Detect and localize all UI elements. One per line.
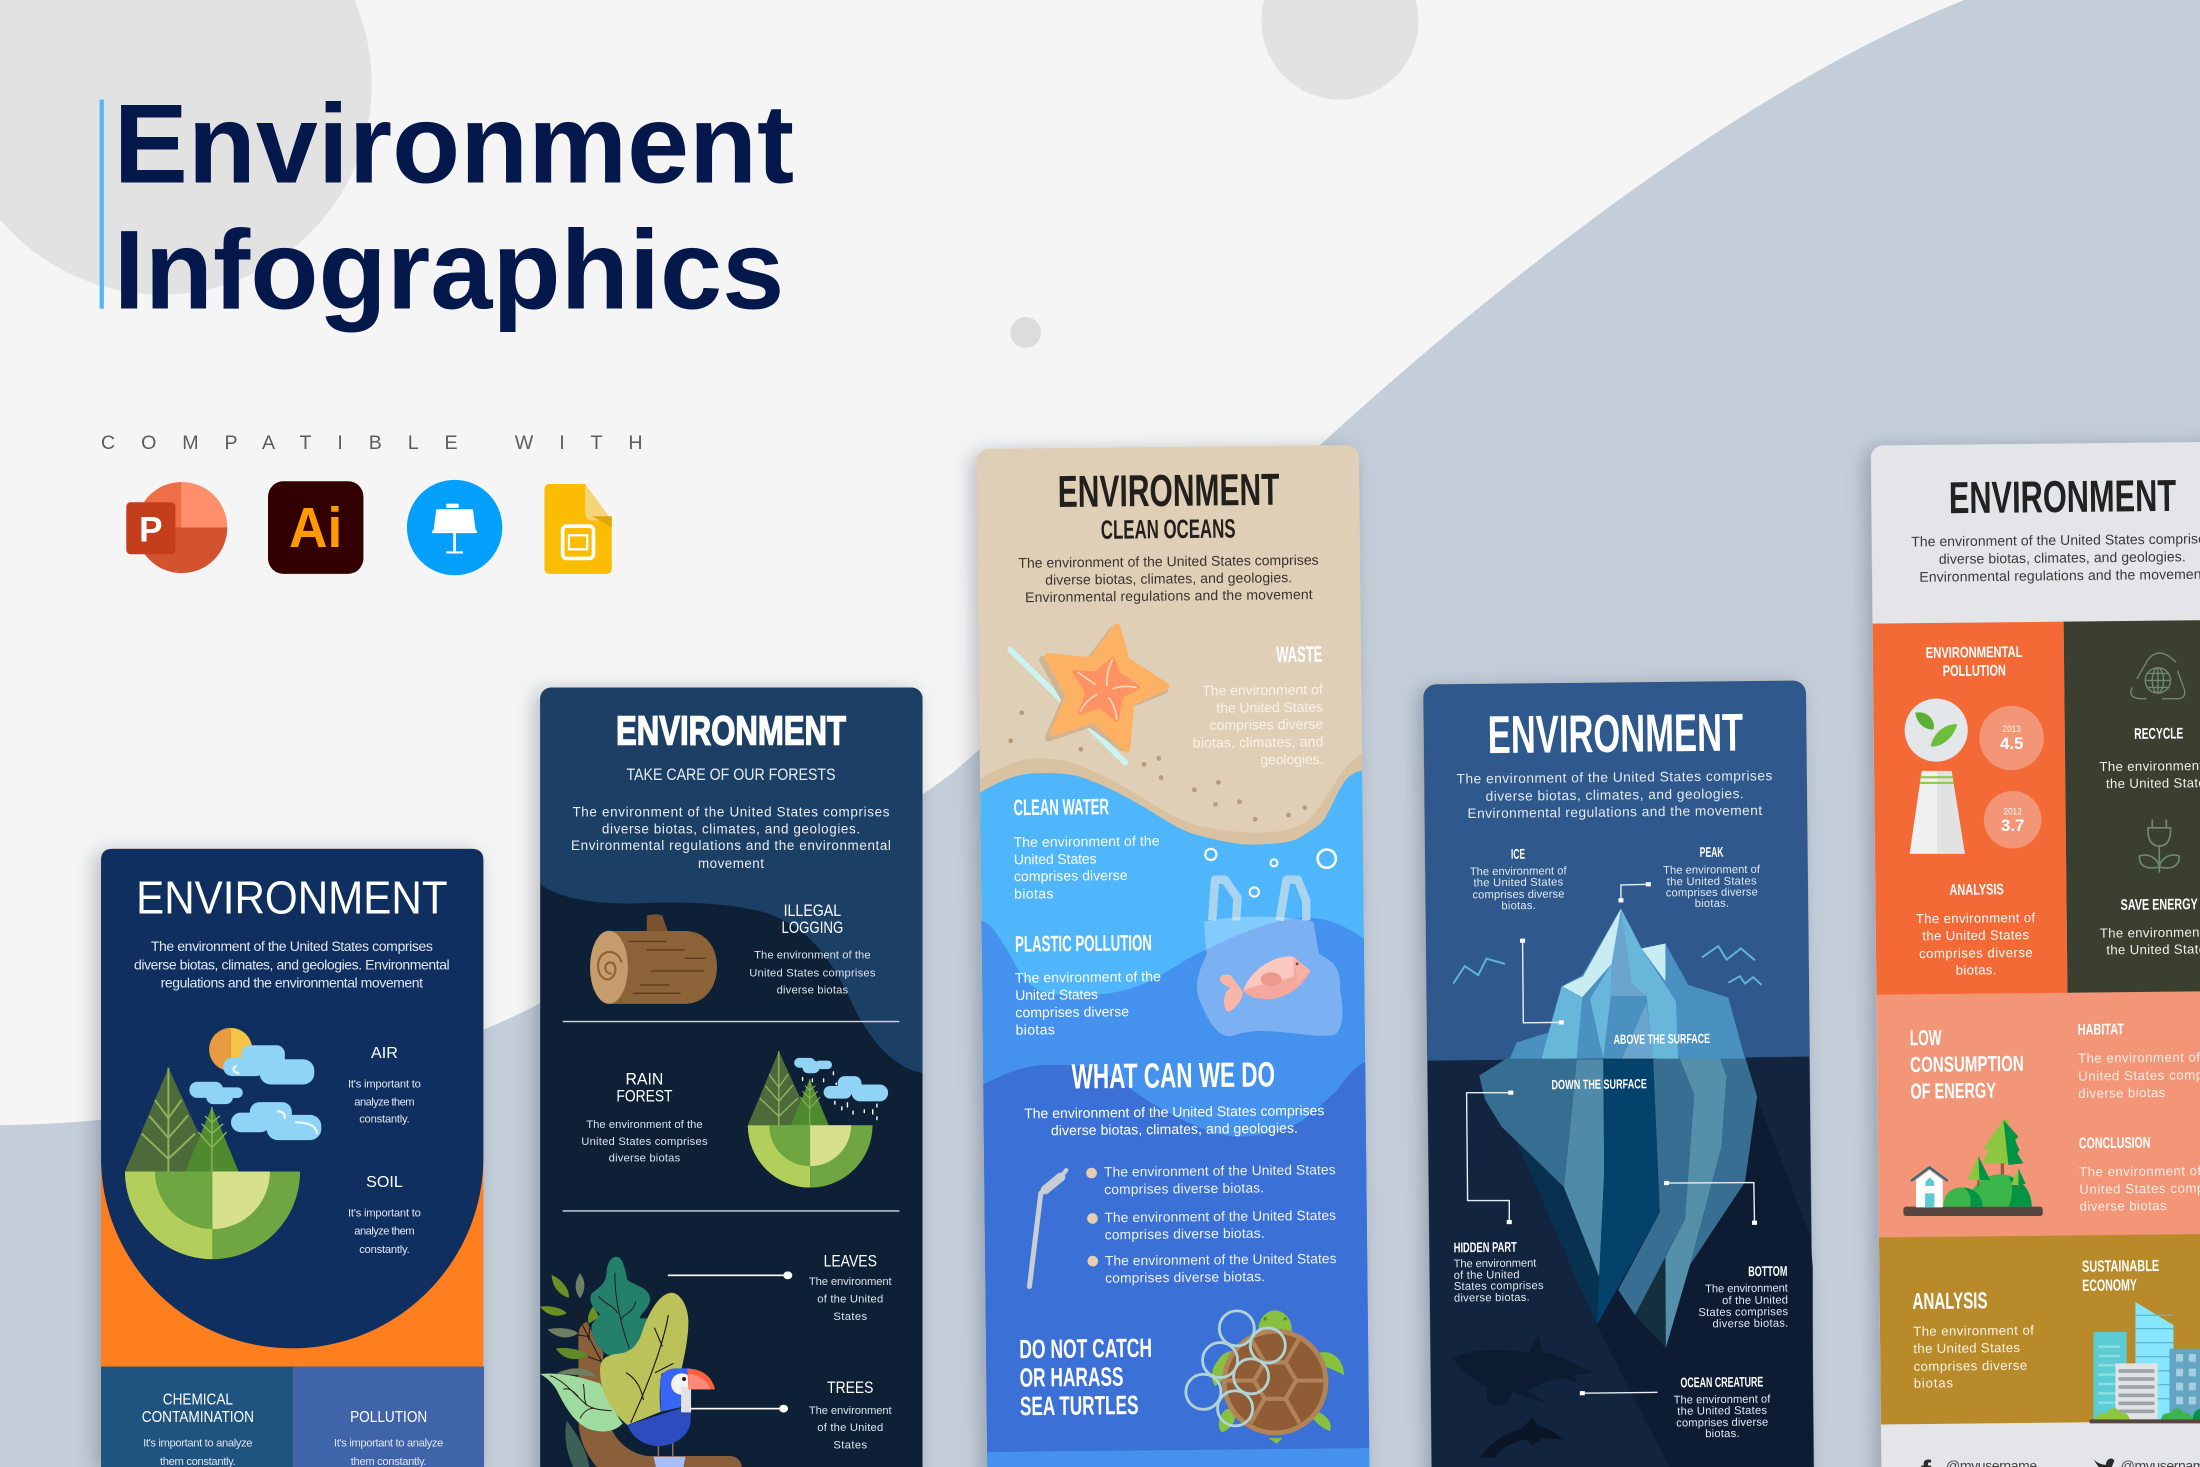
- soil label: [348, 1173, 421, 1256]
- hidden part text: States comprises: [1454, 1280, 1544, 1293]
- chemical contamination text: CHEMICAL: [163, 1390, 233, 1408]
- title: Environment: [114, 80, 794, 206]
- leaves text: The environment: [809, 1276, 893, 1288]
- bottom text: [1698, 1263, 1789, 1330]
- surface labels: DOWN THE SURFACE: [1551, 1076, 1647, 1092]
- waste text: geologies.: [1260, 751, 1324, 767]
- card 4 intro: Environmental regulations and the movement: [1467, 803, 1762, 821]
- card 5 intro: Environmental regulations and the movement: [1919, 566, 2200, 585]
- illegal logging text: ILLEGAL: [784, 901, 841, 920]
- environmental pollution heading: POLLUTION: [1943, 662, 2006, 680]
- hidden part text: [1453, 1238, 1544, 1305]
- plastic pollution text: United States: [1015, 986, 1098, 1003]
- chemical contamination text: [142, 1390, 254, 1467]
- trees text: [809, 1378, 893, 1452]
- data bubble 2013: 4.5: [2000, 734, 2023, 753]
- peak text: the United States: [1667, 875, 1757, 888]
- card 2 intro: movement: [698, 856, 764, 871]
- soil label: It's important to: [348, 1207, 421, 1219]
- title accent bar: [100, 100, 104, 309]
- water shadow: [1597, 1097, 1813, 1467]
- bullet list: comprises diverse biotas.: [1104, 1180, 1264, 1197]
- peak text: The environment of: [1663, 864, 1761, 877]
- bullet list: The environment of the United States: [1104, 1208, 1336, 1225]
- low consumption heading: LOW: [1910, 1025, 1942, 1050]
- ocean creature text: comprises diverse: [1676, 1417, 1768, 1430]
- card 1 intro: The environment of the United States comprises: [151, 938, 433, 954]
- callout lines: [1467, 882, 1757, 1395]
- card 4 intro: diverse biotas, climates, and geologies.: [1485, 786, 1744, 804]
- leaves text: [809, 1251, 893, 1323]
- analysis text: The environment of: [1916, 910, 2036, 926]
- analysis text: ANALYSIS: [1949, 881, 2004, 899]
- card 3 intro: The environment of the United States comprises: [1018, 552, 1319, 571]
- leaves text: LEAVES: [824, 1251, 877, 1270]
- data bubble 2012: [1984, 791, 2041, 849]
- peak text: biotas.: [1695, 898, 1729, 910]
- clean water text: The environment of the: [1014, 833, 1160, 850]
- rain forest text: diverse biotas: [609, 1153, 681, 1165]
- data bubble 2012: 3.7: [2001, 816, 2024, 835]
- illustration: iceberg above water: [1510, 908, 1745, 1059]
- illegal logging text: The environment of the: [754, 949, 871, 961]
- recycle text: [2099, 725, 2200, 791]
- card 2 intro: The environment of the United States comprises: [572, 805, 890, 820]
- card 1 background: [101, 849, 483, 1467]
- illustration: turtle with plastic rings: [1186, 1310, 1344, 1444]
- ice text: the United States: [1473, 876, 1564, 889]
- card 3 subtitle: CLEAN OCEANS: [1101, 513, 1236, 545]
- leaves connector: [668, 1271, 792, 1279]
- ice text: [1470, 845, 1568, 913]
- environmental pollution heading: ENVIRONMENTAL: [1926, 644, 2023, 662]
- card 3 intro: Environmental regulations and the movement: [1025, 586, 1313, 605]
- chemical contamination text: CONTAMINATION: [142, 1408, 254, 1426]
- card 1 chemical block: [101, 1367, 293, 1467]
- icon: Keynote: [407, 480, 502, 575]
- do not catch text: [1019, 1333, 1153, 1421]
- air label: It's important to: [348, 1078, 421, 1090]
- illustration: rain forest: [748, 1051, 888, 1188]
- peak text: comprises diverse: [1666, 886, 1758, 899]
- illustration: iceberg below water: [1479, 1056, 1757, 1348]
- low consumption heading: CONSUMPTION: [1910, 1051, 2024, 1077]
- icon: log: [590, 914, 717, 1004]
- air label: [348, 1044, 421, 1125]
- plastic pollution text: PLASTIC POLLUTION: [1015, 930, 1152, 957]
- peak text: PEAK: [1700, 844, 1724, 860]
- card 3 heading: ENVIRONMENT: [1058, 464, 1280, 517]
- sustainable economy heading: SUSTAINABLE: [2082, 1257, 2159, 1276]
- do not catch text: DO NOT CATCH: [1019, 1333, 1152, 1364]
- air label: analyze them: [354, 1097, 415, 1109]
- card 3 background waves: [977, 445, 1370, 1467]
- what can we do text: diverse biotas, climates, and geologies.: [1051, 1120, 1298, 1138]
- card 2 header wave: [540, 687, 923, 1073]
- compatible software icons: [126, 480, 612, 575]
- ocean creature text: biotas.: [1705, 1428, 1740, 1440]
- card 5 background blocks: [1871, 441, 2200, 1467]
- icon: Illustrator: [268, 481, 363, 574]
- panel: card 1 soil and air: [101, 849, 484, 1467]
- illustration: sea creatures: [1454, 1333, 1594, 1458]
- soil label: analyze them: [354, 1226, 415, 1238]
- clean water text: CLEAN WATER: [1013, 794, 1109, 820]
- air label: AIR: [371, 1044, 398, 1062]
- card 4 intro: The environment of the United States comprises: [1457, 768, 1772, 787]
- divider: [563, 1210, 899, 1212]
- clean water text: United States: [1014, 850, 1097, 867]
- icon: recycle globe: [2131, 653, 2185, 699]
- card 5 intro: diverse biotas, climates, and geologies.: [1939, 548, 2186, 567]
- bottom text: of the United: [1722, 1294, 1788, 1307]
- leaves text: States: [833, 1311, 867, 1323]
- card 4 intro: [1457, 768, 1773, 821]
- save energy text: [2099, 896, 2200, 957]
- panel: card 3 clean oceans: [977, 445, 1370, 1467]
- sustainable economy heading: ECONOMY: [2082, 1276, 2137, 1295]
- illustration: starfish and straw: [1008, 627, 1307, 822]
- trees text: TREES: [827, 1378, 873, 1397]
- air label: constantly.: [359, 1113, 410, 1125]
- hidden part text: diverse biotas.: [1454, 1292, 1530, 1305]
- what can we do text: The environment of the United States comprises: [1024, 1102, 1324, 1121]
- gold analysis text: [1912, 1287, 2035, 1391]
- ice text: The environment of: [1470, 865, 1568, 878]
- do not catch text: OR HARASS: [1019, 1362, 1124, 1393]
- ice text: comprises diverse: [1472, 888, 1565, 901]
- title: Infographics: [114, 207, 784, 333]
- bullet list: [1086, 1162, 1337, 1286]
- illegal logging text: [749, 901, 876, 996]
- trees text: The environment: [809, 1405, 893, 1417]
- illustration: land with trees and clouds: [125, 1028, 321, 1259]
- rain forest text: The environment of the: [586, 1119, 703, 1131]
- rain forest text: [581, 1070, 708, 1165]
- chemical contamination text: It's important to analyze: [143, 1438, 253, 1450]
- what can we do text: [1024, 1102, 1325, 1139]
- bullet list: The environment of the United States: [1105, 1251, 1337, 1268]
- bottom text: The environment: [1705, 1282, 1789, 1295]
- card 1 pollution block: [293, 1367, 484, 1467]
- birds: [1453, 946, 1762, 985]
- analysis text: comprises diverse: [1919, 945, 2033, 961]
- card 1 intro: diverse biotas, climates, and geologies. Environmental: [134, 956, 450, 972]
- low consumption heading: OF ENERGY: [1910, 1078, 1996, 1104]
- decorative small circle: [1010, 317, 1041, 348]
- clean water text: comprises diverse: [1014, 867, 1128, 884]
- trees connector: [690, 1405, 788, 1413]
- leaves text: of the United: [817, 1294, 883, 1306]
- illegal logging text: United States comprises: [749, 968, 876, 980]
- waste text: comprises diverse: [1209, 716, 1323, 733]
- plastic pollution text: comprises diverse: [1015, 1003, 1129, 1020]
- gold analysis text: biotas: [1914, 1375, 1953, 1391]
- conclusion text: [2079, 1134, 2200, 1214]
- rain forest text: FOREST: [616, 1086, 672, 1105]
- ocean creature text: [1673, 1373, 1772, 1441]
- do not catch text: SEA TURTLES: [1020, 1390, 1139, 1421]
- conclusion text: diverse biotas: [2079, 1198, 2167, 1214]
- hidden part text: HIDDEN PART: [1454, 1239, 1517, 1255]
- panel: card 5 energy: [1871, 441, 2200, 1467]
- illustration: house, trees, buildings: [1903, 1120, 2200, 1423]
- analysis text: the United States: [1922, 927, 2029, 943]
- illegal logging text: diverse biotas: [777, 984, 849, 996]
- compatible with label: COMPATIBLE WITH: [101, 432, 643, 454]
- icon: plug plant: [2139, 819, 2179, 873]
- plastic pollution text: The environment of the: [1015, 968, 1161, 986]
- surface labels: [1551, 1031, 1711, 1092]
- waste text: biotas, climates, and: [1193, 733, 1323, 751]
- illustration: bent straw: [1029, 1170, 1066, 1287]
- card 1 heading: ENVIRONMENT: [136, 871, 448, 923]
- data bubble 2013: 2013: [2003, 724, 2021, 734]
- ice text: ICE: [1511, 846, 1525, 862]
- environmental pollution heading: [1926, 644, 2023, 680]
- trees text: of the United: [817, 1422, 883, 1434]
- bullet list: comprises diverse biotas.: [1105, 1226, 1265, 1242]
- icon: PowerPoint: [126, 482, 227, 573]
- surface labels: ABOVE THE SURFACE: [1614, 1031, 1710, 1047]
- icon: Illustrator: Ai: [289, 496, 342, 559]
- low consumption heading: [1910, 1024, 2024, 1104]
- panel: card 2 forests: [540, 687, 923, 1467]
- card 1 navy dome: [101, 849, 483, 1348]
- card 2 intro: Environmental regulations and the environmental: [571, 838, 891, 853]
- bottom text: diverse biotas.: [1712, 1318, 1788, 1330]
- plastic pollution text: [1015, 930, 1162, 1038]
- clean water text: [1013, 794, 1160, 902]
- card 4 background: [1423, 681, 1815, 1467]
- soil label: SOIL: [366, 1173, 403, 1191]
- ocean creature text: OCEAN CREATURE: [1680, 1373, 1763, 1390]
- habitat text: diverse biotas: [2078, 1085, 2166, 1101]
- card 2 intro: [571, 805, 891, 871]
- card 1 intro: [134, 938, 450, 991]
- analysis text: biotas.: [1956, 962, 1996, 978]
- sustainable economy heading: [2082, 1257, 2160, 1295]
- decorative circle top: [1261, 0, 1418, 100]
- icon: Google Slides: [544, 484, 612, 574]
- waste text: WASTE: [1276, 642, 1323, 667]
- gold analysis text: ANALYSIS: [1912, 1287, 1988, 1314]
- soil label: constantly.: [359, 1244, 410, 1256]
- ocean creature text: the United States: [1677, 1405, 1767, 1418]
- gold analysis text: The environment of: [1913, 1323, 2034, 1339]
- ocean creature text: The environment of: [1674, 1394, 1771, 1407]
- card 1 intro: regulations and the environmental movement: [161, 975, 423, 991]
- card 3 intro: diverse biotas, climates, and geologies.: [1045, 569, 1292, 588]
- card 3 text: [1010, 463, 1338, 1421]
- hidden part text: The environment: [1454, 1257, 1537, 1270]
- card 2 intro: diverse biotas, climates, and geologies.: [602, 821, 860, 836]
- ice text: biotas.: [1501, 900, 1536, 912]
- plastic pollution text: biotas: [1015, 1021, 1055, 1038]
- clean water text: biotas: [1014, 885, 1054, 902]
- card 2 heading: ENVIRONMENT: [616, 707, 846, 753]
- card 5 text: [1904, 469, 2200, 1391]
- social handles: [1921, 1454, 2200, 1467]
- bullet list: comprises diverse biotas.: [1105, 1269, 1265, 1286]
- card 4 text: [1448, 703, 1790, 1443]
- illegal logging text: LOGGING: [782, 918, 843, 937]
- card 5 intro: [1911, 530, 2200, 585]
- bullet list: The environment of the United States: [1104, 1162, 1336, 1180]
- trees text: States: [833, 1440, 867, 1452]
- waste text: [1192, 642, 1324, 768]
- card 3 intro: [1018, 552, 1319, 605]
- analysis text: [1916, 881, 2036, 978]
- illustration: factory tower with leaves: [1905, 699, 1968, 854]
- hidden part text: of the United: [1454, 1269, 1520, 1282]
- pollution text: POLLUTION: [350, 1408, 427, 1426]
- what can we do heading: WHAT CAN WE DO: [1071, 1055, 1275, 1096]
- rain forest text: United States comprises: [581, 1136, 708, 1148]
- card 2 background: [540, 687, 923, 1467]
- gold analysis text: comprises diverse: [1913, 1358, 2027, 1374]
- bottom text: BOTTOM: [1748, 1263, 1788, 1279]
- bottom text: States comprises: [1698, 1306, 1789, 1319]
- gold analysis text: the United States: [1913, 1340, 2020, 1356]
- card 2 subtitle: TAKE CARE OF OUR FORESTS: [626, 765, 836, 784]
- waste text: The environment of: [1202, 681, 1323, 699]
- divider: [563, 1021, 899, 1022]
- panel: card 4 iceberg: [1423, 681, 1815, 1467]
- conclusion text: CONCLUSION: [2079, 1135, 2151, 1152]
- data bubble 2012: 2012: [2004, 807, 2022, 817]
- title: [114, 80, 794, 333]
- card 4 heading: ENVIRONMENT: [1487, 704, 1743, 765]
- peak text: [1663, 843, 1761, 910]
- habitat text: HABITAT: [2078, 1021, 2124, 1039]
- rain forest text: RAIN: [625, 1070, 663, 1089]
- illustration: leaves and toucan: [540, 1257, 742, 1467]
- pollution text: [334, 1408, 443, 1467]
- waste text: the United States: [1216, 699, 1323, 716]
- pollution text: It's important to analyze: [334, 1438, 443, 1450]
- decorative circle top-left: [0, 0, 372, 295]
- icon: PowerPoint: P: [139, 511, 163, 550]
- habitat text: [2078, 1020, 2200, 1101]
- illustration: plastic bag and fish: [1197, 849, 1343, 1036]
- data bubble 2013: [1979, 706, 2044, 770]
